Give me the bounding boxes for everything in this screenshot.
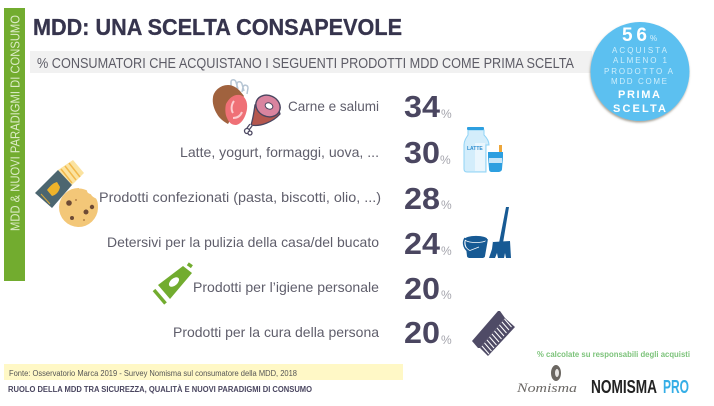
callout: 56% circle [590,22,690,121]
row: latte: 30 [404,135,440,170]
title: MDD: UNA SCELTA CONSAPEVOLE [33,14,402,40]
logo: Nomisma Pro: NOMISMA [591,377,657,397]
row: detersivi: Detersivi per la pulizia della casa/del bucato [107,234,379,250]
footer heading: RUOLO DELLA MDD TRA SICUREZZA, QUALITÀ E NUOVI PARADIGMI DI CONSUMO [8,385,312,394]
icon: comb [472,311,515,356]
row: cura della persona: % [441,333,452,347]
callout: 56% circle: ALMENO 1 [613,56,668,65]
row: latte [180,135,451,170]
row: prodotti confezionati: 28 [404,181,440,216]
row: prodotti confezionati: Prodotti confezionati (pasta, biscotti, olio, ...) [99,189,381,205]
callout: 56% circle: PRIMA [618,89,660,101]
callout: 56% circle: SCELTA [613,103,666,115]
callout: 56% circle: ACQUISTA [612,46,668,55]
icon: meat and ham [213,80,284,135]
row: carne e salumi: 34 [404,89,441,124]
source note: Fonte: Osservatorio Marca 2019 - Survey Nomisma sul consumatore della MDD, 2018 [9,369,298,378]
subtitle band: % CONSUMATORI CHE ACQUISTANO I SEGUENTI PRODOTTI MDD COME PRIMA SCELTA [37,55,574,72]
row: carne e salumi [288,89,452,124]
side bar: section label [4,8,25,281]
logo: Nomisma Pro: PRO [663,377,689,397]
row: cura della persona: 20 [404,315,440,350]
icon: green tube [154,262,193,304]
note: calculation basis: % calcolate su responsabili degli acquisti [537,350,690,359]
row: latte: Latte, yogurt, formaggi, uova, ... [180,144,379,160]
icon: milk bottle and yogurt [464,127,503,172]
row: detersivi: 24 [404,226,441,261]
row: cura della persona [173,315,452,350]
row: latte: % [440,153,451,167]
callout: 56% circle: % [650,34,657,43]
row: prodotti confezionati: % [441,198,452,212]
callout: 56% circle: 56 [622,25,647,46]
callout: 56% circle: MDD COME [611,77,667,86]
row: detersivi [107,226,452,261]
row: igiene personale [193,271,452,306]
row: igiene personale: Prodotti per l’igiene personale [193,279,379,295]
row: prodotti confezionati [99,181,452,216]
source note [4,364,403,380]
row: carne e salumi: Carne e salumi [288,98,379,114]
logo: Nomisma: Nomisma [516,380,578,395]
row: detersivi: % [441,244,452,258]
icon: milk bottle and yogurt: LATTE [467,146,483,152]
callout: 56% circle: PRODOTTO A [604,67,674,76]
subtitle band [30,51,592,73]
icon: packaged food and cookie [35,160,98,227]
row: carne e salumi: % [441,107,452,121]
row: cura della persona: Prodotti per la cura della persona [173,324,379,340]
logo: Nomisma [516,365,578,395]
icon: bucket and mop [464,207,511,258]
row: igiene personale: % [441,288,452,302]
row: igiene personale: 20 [404,271,440,306]
